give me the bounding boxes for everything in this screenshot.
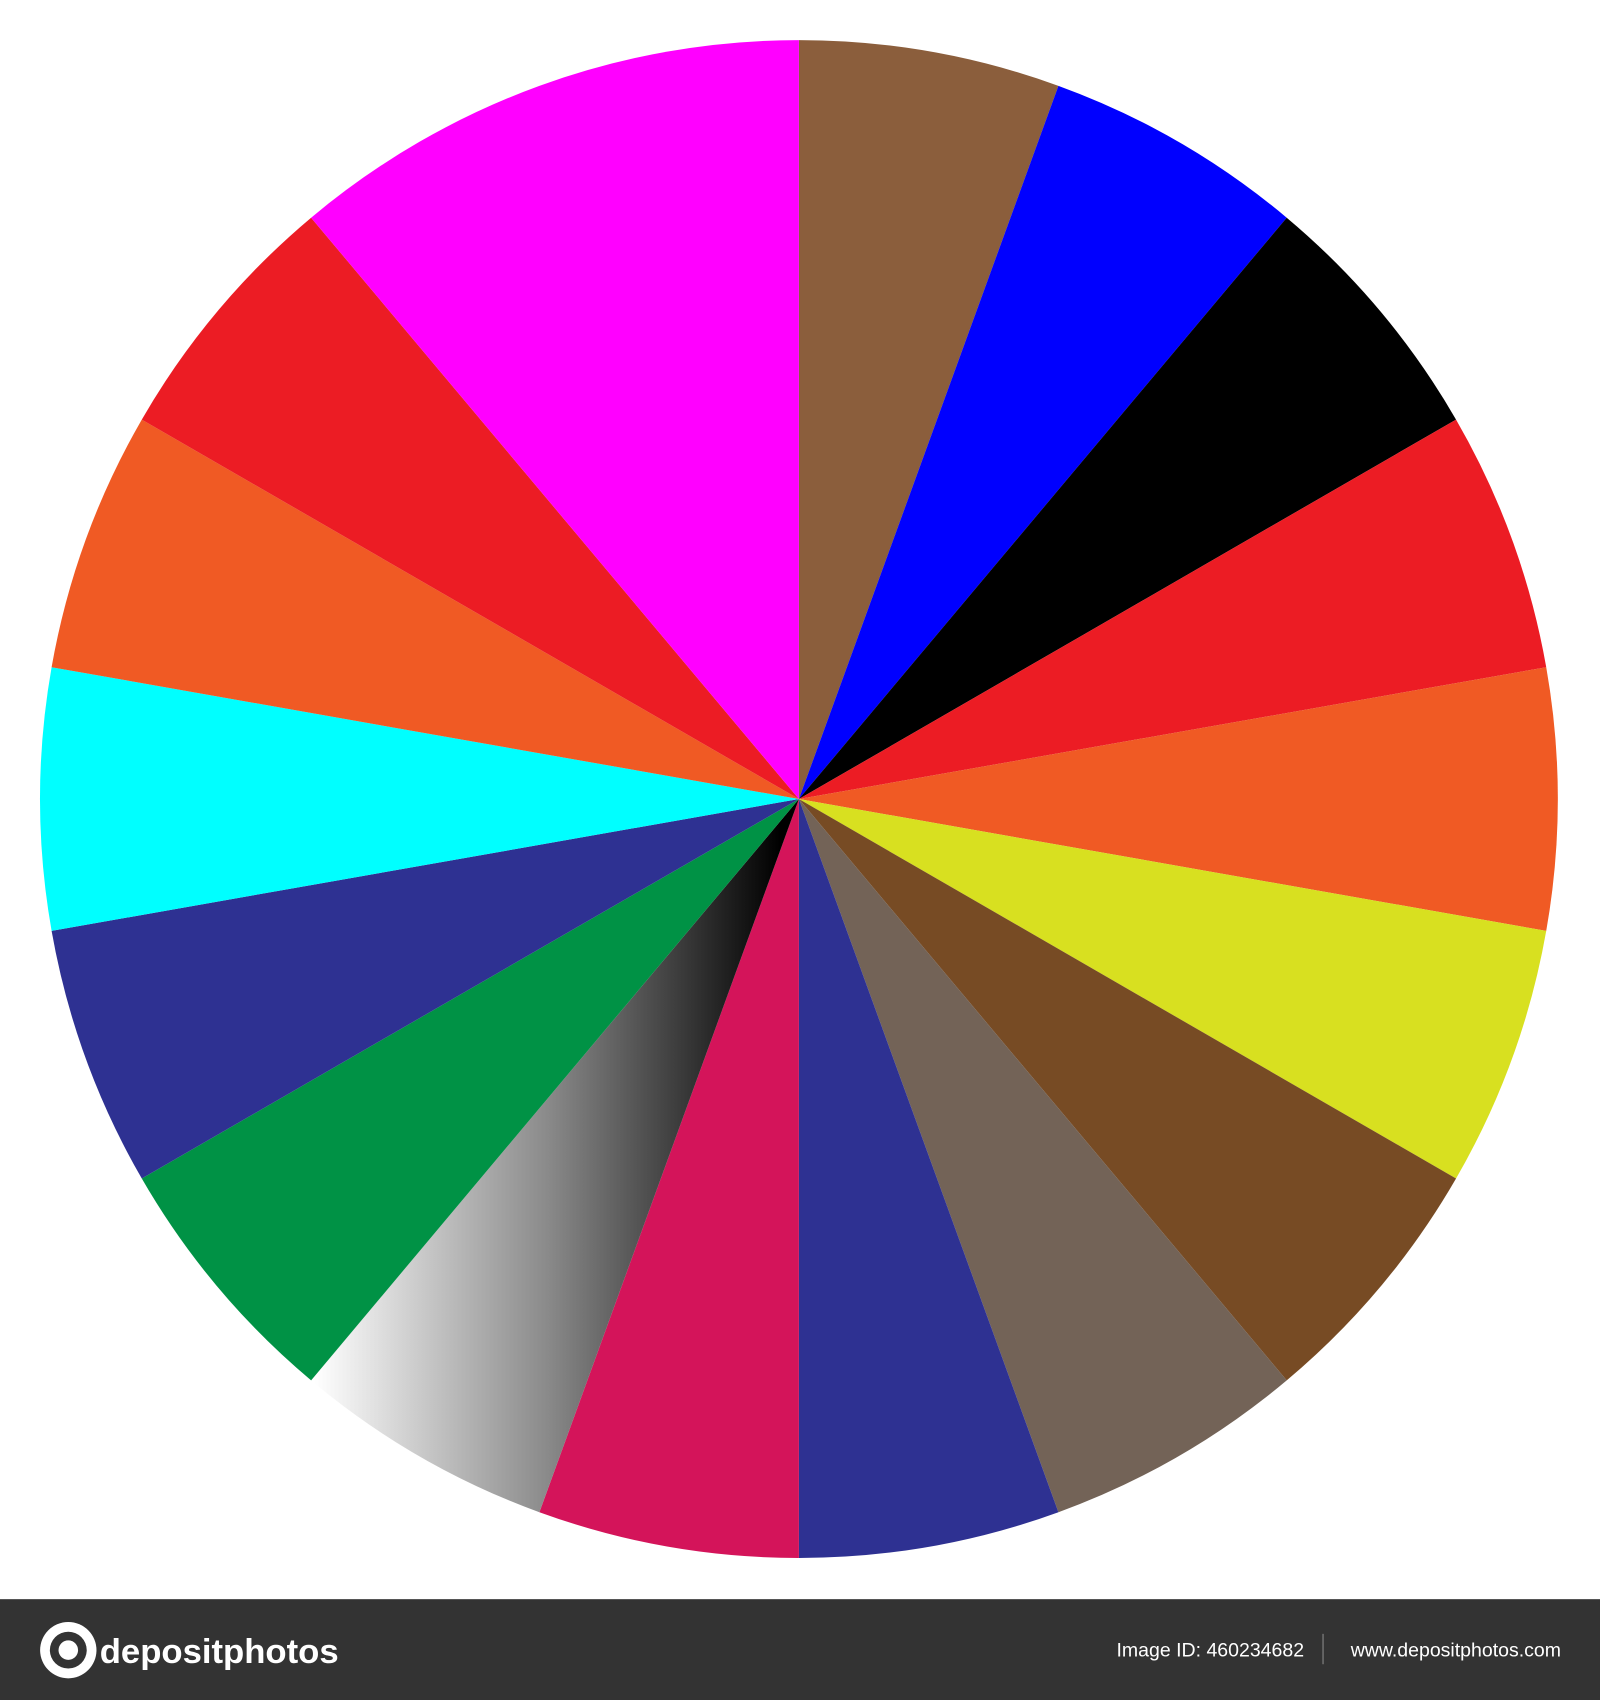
brand name: depositphotos <box>100 1633 339 1671</box>
image id: Image ID: 460234682 <box>1117 1640 1304 1662</box>
footer bar <box>0 1599 1600 1700</box>
icon: logo <box>40 1622 96 1678</box>
website: www.depositphotos.com <box>1350 1640 1561 1662</box>
